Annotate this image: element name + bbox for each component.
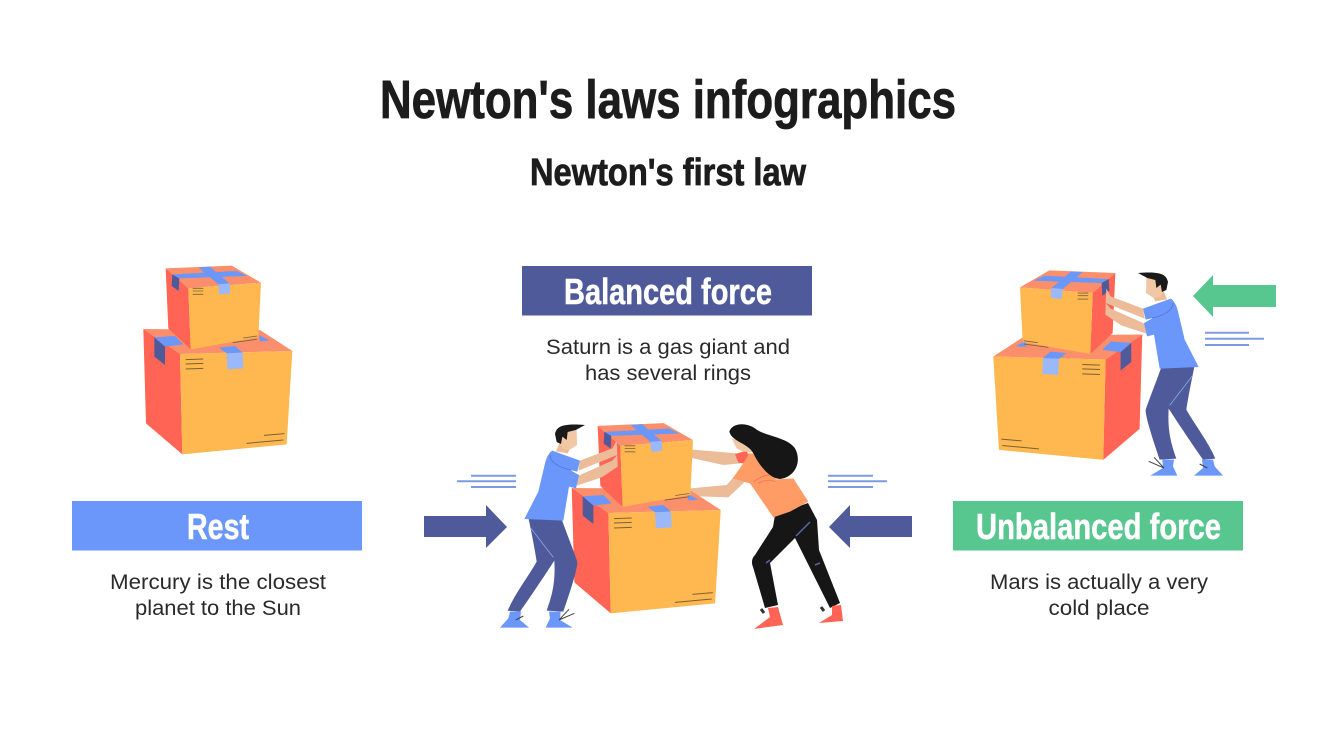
illustration: man pushing right [500,425,618,628]
speed lines: right [828,476,887,487]
text: Unbalanced force description [990,571,1209,620]
illustration: boxes at rest [143,266,292,454]
illustration: woman pushing left [690,424,843,629]
illustration: man pushing left [1105,273,1223,476]
banner: Unbalanced force: Unbalanced force [976,506,1221,547]
speed lines: green arrow [1205,333,1264,345]
text: Rest description: Mercury is the closest [110,571,326,594]
arrow: green pushing left [1193,275,1276,317]
banner: Rest [72,501,362,550]
title: Newton's laws infographics [380,70,956,130]
text: Balanced force description: has several rings [585,362,751,385]
text: Rest description [110,571,326,620]
text: Unbalanced force description: cold place [1048,597,1150,620]
arrow: blue pushing left [829,505,912,548]
speed lines: left [457,476,516,487]
illustration: unbalanced boxes [993,270,1142,460]
text: Balanced force description [546,336,790,385]
text: Unbalanced force description: Mars is actually a very [990,571,1209,594]
banner: Rest: Rest [187,506,249,547]
illustration: balanced boxes [572,423,721,613]
arrow: blue pushing right [424,505,507,548]
text: Rest description: planet to the Sun [135,597,301,620]
banner: Balanced force: Balanced force [564,271,772,312]
banner: Balanced force [522,266,812,316]
subtitle: Newton's first law [530,152,806,194]
banner: Unbalanced force [953,501,1243,550]
text: Balanced force description: Saturn is a gas giant and [546,336,790,359]
